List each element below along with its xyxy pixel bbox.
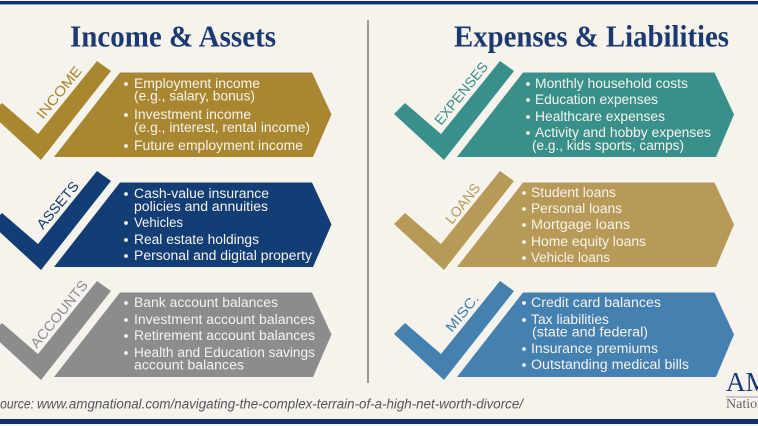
text block: loans items: Vehicle loans	[531, 250, 610, 265]
text block: income items: (e.g., interest, rental income)	[134, 120, 310, 135]
text block: misc items: Tax liabilities	[531, 312, 609, 327]
text block: loans items: Student loans	[531, 185, 616, 200]
text block: assets items	[124, 186, 312, 263]
text block: income items: Employment income	[134, 76, 260, 91]
panel: assets	[0, 171, 332, 270]
icon: income check mark	[0, 61, 111, 160]
label: accounts: ACCOUNTS	[27, 277, 91, 351]
icon: expenses check mark	[394, 61, 514, 160]
text block: loans items: Mortgage loans	[531, 217, 630, 232]
arrow: loans banner	[457, 182, 734, 267]
text block: misc items: Insurance premiums	[531, 341, 658, 356]
text block: assets items: Vehicles	[134, 215, 183, 230]
text block: assets items: Cash-value insurance	[134, 186, 269, 201]
panel: expenses	[394, 59, 734, 160]
icon: assets check mark	[0, 171, 111, 270]
text block: expenses items: (e.g., kids sports, camps)	[532, 138, 684, 153]
text block: accounts items	[124, 295, 315, 372]
text block: misc items: (state and federal)	[532, 324, 648, 340]
arrow: income banner	[54, 72, 332, 157]
text block: expenses items: Monthly household costs	[535, 76, 688, 91]
text block: income items	[124, 76, 310, 153]
text block: loans items: Personal loans	[531, 201, 622, 216]
arrow: accounts banner	[54, 292, 332, 377]
text block: misc items: Outstanding medical bills	[531, 357, 689, 372]
text block: income items: Future employment income	[134, 138, 303, 153]
text block: assets items: policies and annuities	[134, 199, 268, 214]
text block: expenses items: Activity and hobby expenses	[535, 125, 711, 140]
icon: misc check mark	[394, 281, 514, 380]
panel: income	[0, 61, 332, 160]
arrow: expenses banner	[457, 72, 734, 157]
text block: accounts items: Investment account balances	[134, 312, 315, 327]
label: assets: ASSETS	[33, 178, 82, 232]
text block: accounts items: Health and Education savings	[134, 345, 315, 360]
text block: income items: Investment income	[134, 107, 251, 122]
text block: accounts items: Retirement account balances	[134, 328, 315, 343]
logo: AMG National	[726, 367, 758, 412]
text block: loans items: Home equity loans	[531, 234, 646, 249]
text block: loans items	[522, 185, 646, 265]
arrow: misc banner	[457, 292, 734, 377]
title: Income & Assets: Income & Assets	[70, 20, 276, 54]
label: income: INCOME	[33, 63, 85, 122]
label: expenses: EXPENSES	[431, 59, 491, 128]
text block: expenses items: Education expenses	[535, 92, 658, 107]
text block: accounts items: Bank account balances	[134, 295, 278, 310]
label: misc: MISC.	[442, 291, 482, 335]
text block: misc items: Credit card balances	[531, 295, 661, 310]
panel: misc	[394, 281, 734, 380]
text block: accounts items: account balances	[134, 358, 244, 372]
text block: misc items	[522, 295, 689, 372]
panel: accounts	[0, 277, 332, 380]
icon: loans check mark	[394, 171, 514, 270]
title: Expenses & Liabilities: Expenses & Liabilities	[454, 20, 729, 54]
panel: loans	[394, 171, 734, 270]
arrow: assets banner	[54, 182, 332, 267]
text block: expenses items	[526, 76, 711, 153]
text block: assets items: Real estate holdings	[134, 232, 259, 247]
text block: expenses items: Healthcare expenses	[535, 109, 665, 124]
icon: accounts check mark	[0, 281, 111, 380]
source line: www.amgnational.com/navigating-the-complex-terrain-of-a-high-net-worth-divorce/	[37, 396, 524, 412]
text block: assets items: Personal and digital property	[134, 248, 312, 263]
text block: income items: (e.g., salary, bonus)	[134, 88, 255, 104]
label: loans: LOANS	[442, 180, 483, 227]
